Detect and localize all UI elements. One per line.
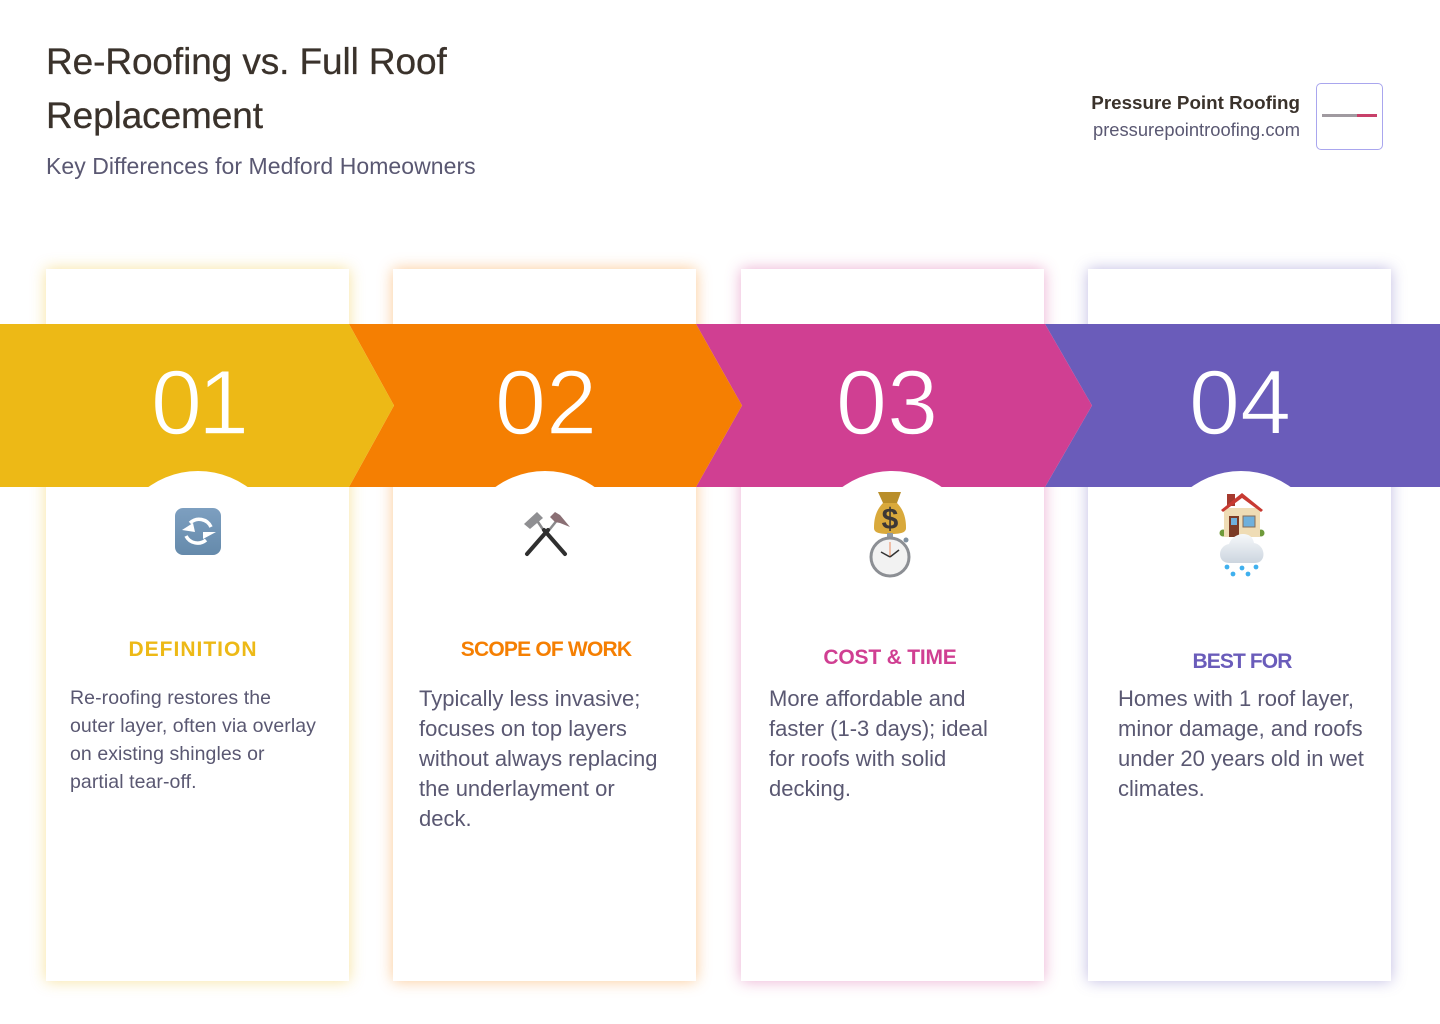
text: definition: partial tear-off. [70, 771, 197, 793]
title [46, 41, 447, 136]
text: cost and time: More affordable and [769, 686, 966, 711]
arrow 04 [1045, 324, 1440, 487]
heading: cost and time: COST & TIME [823, 646, 957, 669]
number 04: 04 [1189, 352, 1291, 454]
icon: money bag and stopwatch [870, 492, 910, 578]
text: scope of work: without always replacing [419, 746, 657, 771]
arrow 01 [0, 324, 394, 487]
text: scope of work: the underlayment or [419, 776, 615, 801]
text: cost and time [769, 686, 988, 801]
title: Replacement [46, 95, 263, 136]
text: scope of work: Typically less invasive; [419, 686, 640, 711]
number 02: 02 [495, 352, 597, 454]
text: definition: on existing shingles or [70, 743, 265, 765]
panel: best for card [1088, 269, 1391, 981]
panel: cost and time card [741, 269, 1044, 981]
panel: definition card [46, 269, 349, 981]
text: best for: Homes with 1 roof layer, [1118, 686, 1354, 711]
brand name: Pressure Point Roofing [1091, 92, 1300, 113]
text: cost and time: faster (1-3 days); ideal [769, 716, 988, 741]
title: Re-Roofing vs. Full Roof [46, 41, 447, 82]
text: best for: under 20 years old in wet [1118, 746, 1364, 771]
number 01: 01 [151, 352, 245, 454]
heading: scope of work: SCOPE OF WORK [461, 638, 631, 661]
text: definition: outer layer, often via overlay [70, 715, 316, 737]
heading: best for: BEST FOR [1193, 650, 1291, 673]
text: best for [1118, 686, 1364, 801]
text: definition [70, 687, 316, 793]
logo box [1316, 83, 1383, 150]
brand website: pressurepointroofing.com [1093, 119, 1300, 140]
text: scope of work: deck. [419, 806, 472, 831]
icon: refresh arrows [175, 508, 221, 555]
panel: scope of work card [393, 269, 696, 981]
icon: money bag and stopwatch: $ [882, 503, 899, 536]
text: best for: minor damage, and roofs [1118, 716, 1363, 741]
heading: definition: DEFINITION [128, 638, 258, 661]
arrow 02 [349, 324, 742, 487]
subtitle: Key Differences for Medford Homeowners [46, 153, 476, 179]
icon: crossed hammers [524, 512, 570, 556]
arrow band [0, 324, 1440, 487]
white notches [148, 471, 1290, 487]
icon: house and rain cloud [1220, 493, 1264, 576]
number 03: 03 [836, 352, 938, 454]
text: cost and time: for roofs with solid [769, 746, 946, 771]
arrow 03 [696, 324, 1092, 487]
text: definition: Re-roofing restores the [70, 687, 271, 709]
text: scope of work: focuses on top layers [419, 716, 627, 741]
text: best for: climates. [1118, 776, 1205, 801]
text: scope of work [419, 686, 657, 831]
text: cost and time: decking. [769, 776, 851, 801]
